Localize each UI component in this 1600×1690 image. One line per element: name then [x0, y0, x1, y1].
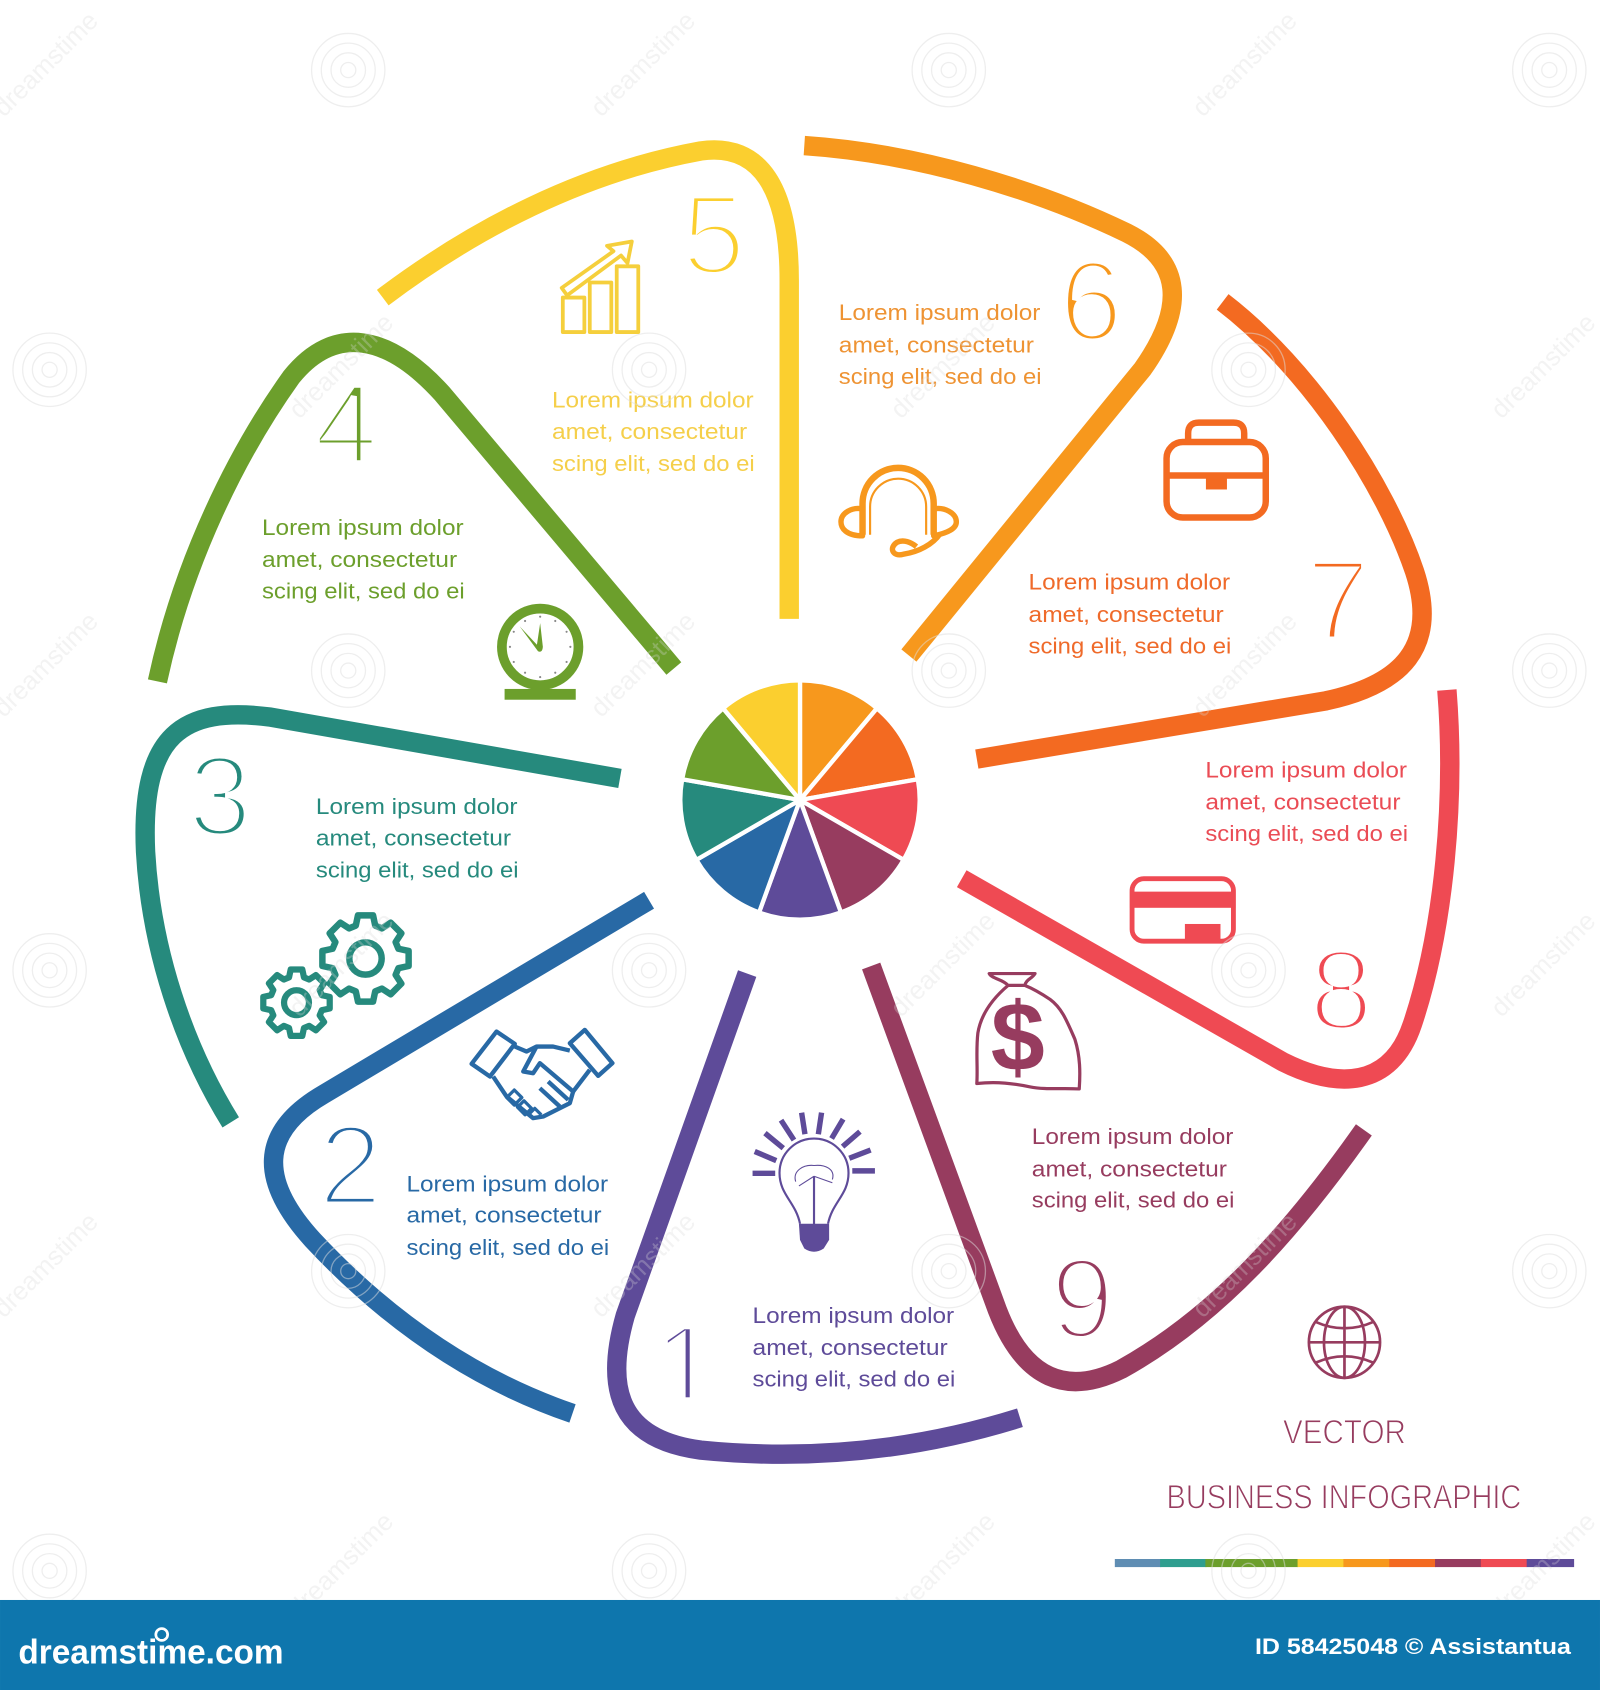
footer banner — [0, 1600, 1600, 1690]
icon: money bag — [977, 974, 1080, 1092]
icon: handshake — [472, 1030, 612, 1118]
text 8: scing elit, sed do ei — [1205, 821, 1408, 846]
text 7: amet, consectetur — [1029, 602, 1224, 627]
text 3: amet, consectetur — [316, 825, 512, 850]
text 6: amet, consectetur — [839, 333, 1034, 358]
text 3: scing elit, sed do ei — [316, 858, 519, 883]
arc 8 — [962, 690, 1450, 1079]
text 1: scing elit, sed do ei — [753, 1367, 955, 1392]
watermark layer: dreamstime — [885, 907, 1001, 1022]
panel 3: teal — [145, 715, 620, 1122]
icon: globe — [1309, 1307, 1380, 1378]
arc 9 — [871, 966, 1364, 1382]
watermark layer: dreamstime — [284, 907, 399, 1022]
panel 6: orange — [804, 146, 1172, 656]
icon: money bag: $ — [991, 983, 1045, 1092]
arc 3 — [145, 715, 620, 1122]
watermark layer: dreamstime — [1187, 607, 1303, 723]
icon: headset — [841, 468, 956, 555]
arc 5 — [383, 150, 789, 619]
text 8: amet, consectetur — [1205, 790, 1401, 815]
icon: light bulb — [753, 1113, 875, 1252]
watermark layer: dreamstime — [885, 1508, 1001, 1623]
panel 9: plum — [871, 966, 1364, 1382]
icon: clock — [502, 609, 578, 700]
watermark layer: dreamstime — [1486, 907, 1600, 1022]
text 6: scing elit, sed do ei — [839, 364, 1042, 389]
text 1: amet, consectetur — [753, 1335, 948, 1360]
footer credit: ID 58425048 © Assistantua — [1255, 1634, 1571, 1659]
icon: growth chart — [562, 242, 638, 332]
number 7: 7 — [1306, 537, 1370, 664]
number 8: 8 — [1309, 928, 1373, 1055]
watermark layer: dreamstime — [284, 309, 399, 424]
panel 1: purple — [617, 974, 1020, 1454]
text 5: scing elit, sed do ei — [552, 451, 755, 476]
text 4: scing elit, sed do ei — [262, 578, 465, 603]
watermark layer: dreamstime — [284, 1508, 399, 1623]
arc 1 — [617, 974, 1020, 1454]
number 6: 6 — [1059, 239, 1123, 366]
panel 7: dark orange — [977, 302, 1422, 759]
watermark layer: dreamstime — [586, 7, 701, 122]
panel 8: red — [962, 690, 1450, 1079]
icon: briefcase — [1167, 423, 1266, 518]
number 4: 4 — [314, 362, 378, 489]
heading: business infographic: BUSINESS INFOGRAPHIC — [1167, 1478, 1521, 1516]
panel 4: green — [157, 342, 674, 700]
watermark layer: dreamstime — [586, 607, 701, 723]
number 1: 1 — [654, 1303, 717, 1430]
watermark layer: dreamstime — [1486, 309, 1600, 424]
text 9: amet, consectetur — [1032, 1156, 1227, 1181]
text 5: Lorem ipsum dolor — [552, 388, 754, 413]
number 3: 3 — [188, 734, 252, 861]
text 2: scing elit, sed do ei — [406, 1235, 609, 1260]
watermark layer: dreamstime — [1187, 7, 1303, 122]
text 1: Lorem ipsum dolor — [753, 1303, 955, 1328]
text 2: Lorem ipsum dolor — [406, 1171, 609, 1196]
footer logo: dreamstime.com — [18, 1634, 284, 1672]
text 7: scing elit, sed do ei — [1029, 633, 1231, 658]
icon: credit card — [1130, 879, 1236, 943]
watermark layer: dreamstime — [586, 1208, 701, 1323]
number 5: 5 — [682, 172, 746, 299]
text 8: Lorem ipsum dolor — [1205, 757, 1407, 782]
text 9: Lorem ipsum dolor — [1032, 1124, 1234, 1149]
text 5: amet, consectetur — [552, 419, 748, 444]
number 2: 2 — [319, 1102, 382, 1229]
panel 2: blue — [274, 900, 649, 1413]
text 7: Lorem ipsum dolor — [1029, 570, 1231, 595]
arc 6 — [804, 146, 1172, 656]
arc 2 — [274, 900, 649, 1413]
watermark layer: dreamstime — [1187, 1208, 1303, 1323]
watermark layer: dreamstime — [1486, 1508, 1600, 1623]
heading: vector: VECTOR — [1283, 1414, 1406, 1452]
text 4: amet, consectetur — [262, 547, 458, 572]
text 3: Lorem ipsum dolor — [316, 794, 518, 819]
icon: gears — [263, 915, 409, 1036]
text 2: amet, consectetur — [406, 1203, 602, 1228]
arc 4 — [157, 342, 674, 681]
text 4: Lorem ipsum dolor — [262, 515, 464, 540]
center pie chart — [680, 680, 920, 920]
colour strip — [1115, 1559, 1574, 1567]
text 6: Lorem ipsum dolor — [839, 300, 1041, 325]
number 9: 9 — [1051, 1236, 1114, 1363]
panel 5: yellow — [383, 150, 789, 619]
watermark layer: dreamstime — [885, 309, 1001, 424]
arc 7 — [977, 302, 1422, 759]
text 9: scing elit, sed do ei — [1032, 1188, 1234, 1213]
